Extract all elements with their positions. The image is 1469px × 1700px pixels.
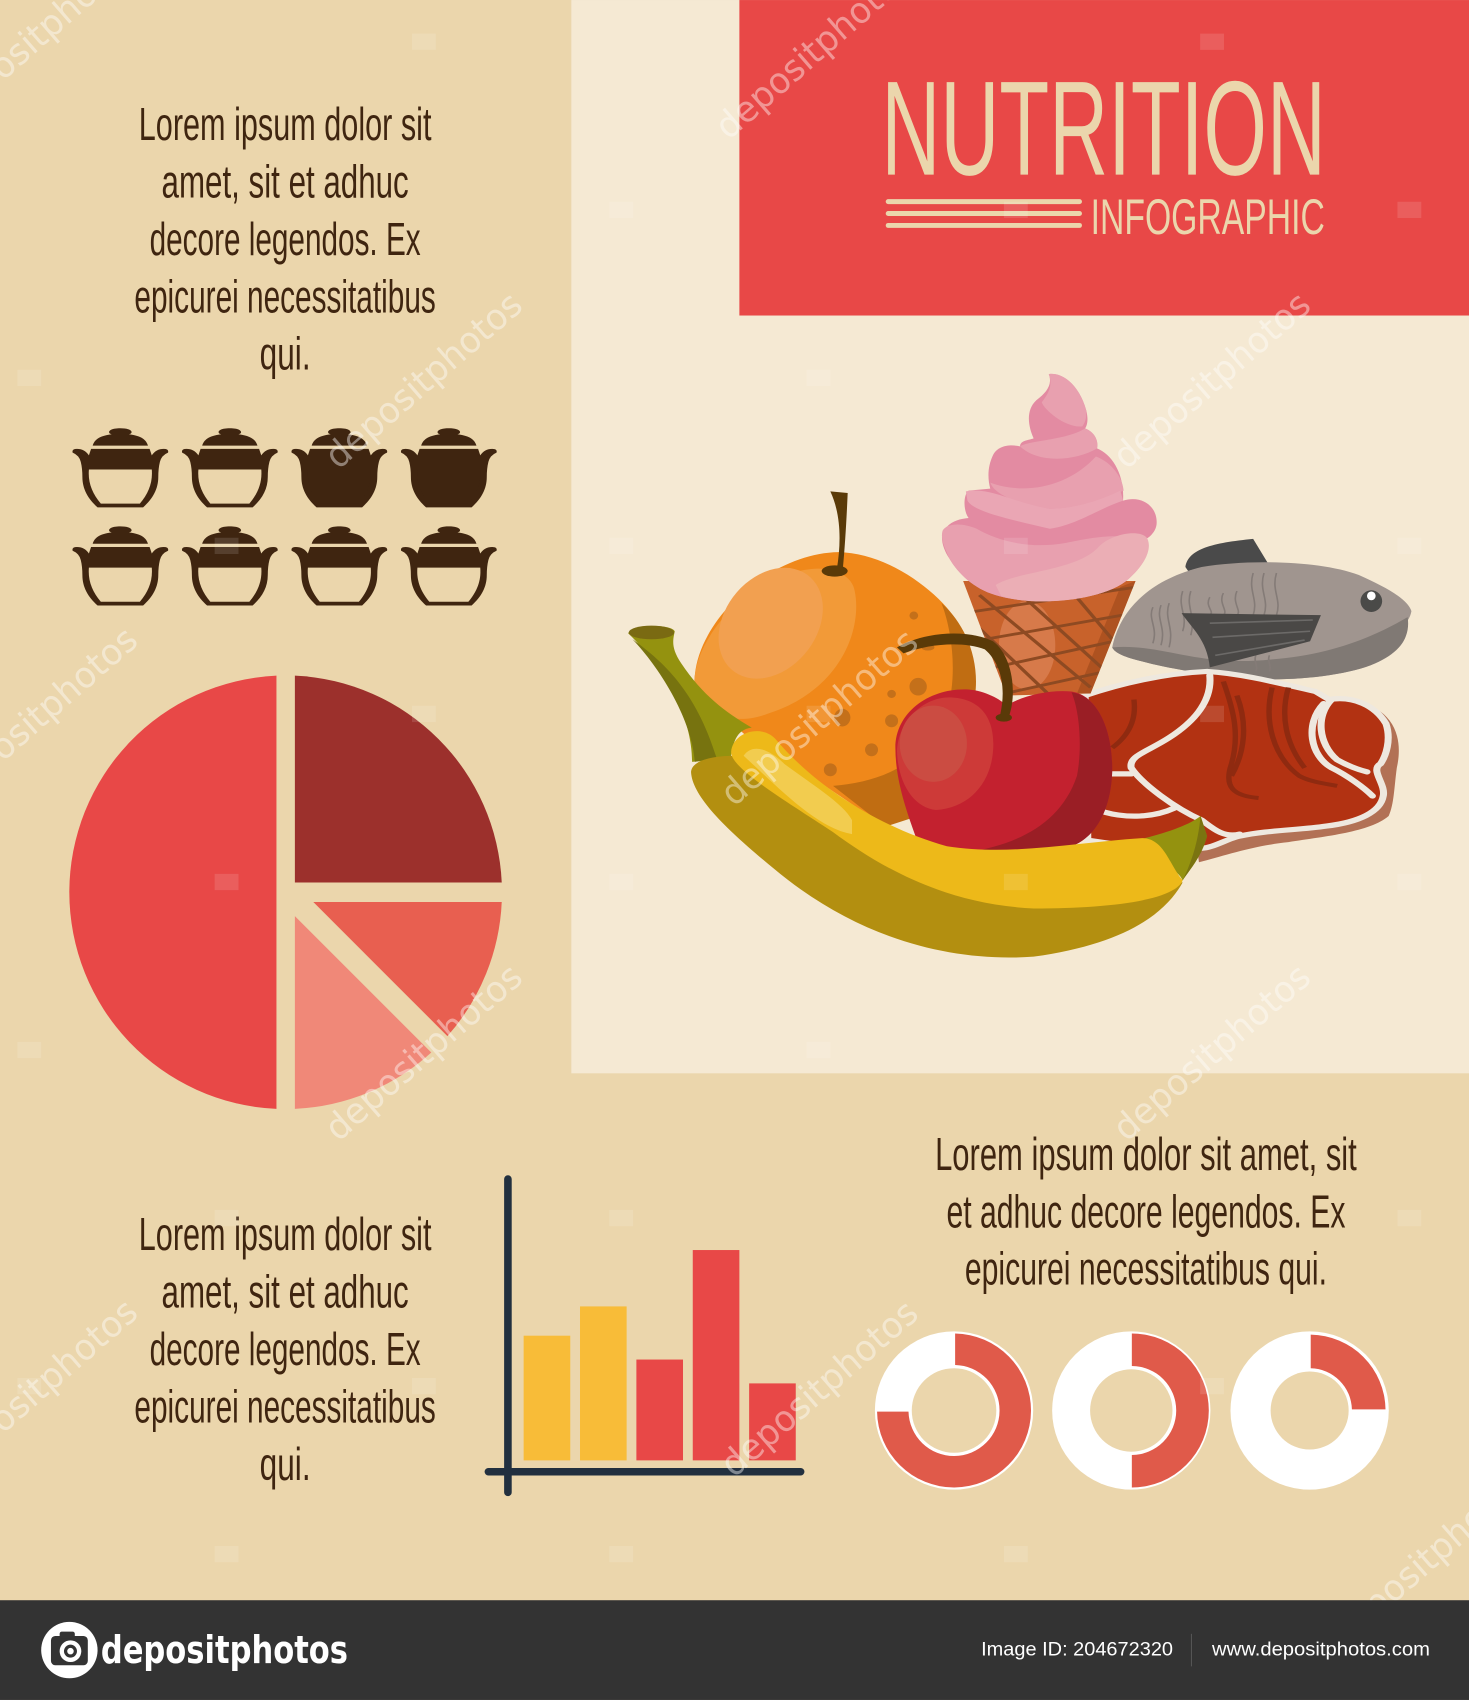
watermark: diagonal wordmarks: depositphotos bbox=[317, 284, 531, 477]
ice cream swirl bbox=[942, 374, 1157, 601]
text block: top left: Lorem ipsum dolor sit bbox=[139, 98, 432, 150]
bar 4 bbox=[693, 1250, 739, 1460]
text block: top left bbox=[134, 98, 436, 380]
panel: red title banner bbox=[739, 0, 1469, 316]
text block: top left: decore legendos. Ex bbox=[150, 213, 421, 265]
icon grid: cooking pots bbox=[72, 428, 497, 606]
pie slice: quarter bbox=[295, 676, 502, 883]
illustration: food group bbox=[628, 374, 1411, 958]
watermark: diagonal wordmarks: depositphotos bbox=[317, 956, 531, 1149]
text block: top left: qui. bbox=[260, 328, 311, 380]
donut chart: 50 percent bbox=[1052, 1331, 1210, 1490]
pie chart bbox=[69, 676, 502, 1109]
footer bar bbox=[0, 1600, 1469, 1700]
bar 1 bbox=[524, 1336, 570, 1460]
fish bbox=[1112, 539, 1411, 679]
text block: bottom right bbox=[935, 1128, 1357, 1295]
icon: camera logo bbox=[41, 1622, 98, 1678]
website url: www.depositphotos.com bbox=[1211, 1639, 1430, 1661]
banana bbox=[628, 626, 1207, 958]
bar chart bbox=[485, 1175, 804, 1496]
text block: top left: epicurei necessitatibus bbox=[134, 270, 436, 322]
watermark: diagonal wordmarks: depositphotos bbox=[713, 621, 926, 814]
bar 2 bbox=[580, 1306, 627, 1460]
orange fruit bbox=[694, 491, 976, 828]
text block: bottom left: Lorem ipsum dolor sit bbox=[139, 1208, 432, 1260]
gap between apple and banana bbox=[887, 818, 925, 842]
pot 2 empty bbox=[182, 428, 278, 507]
bar 5 bbox=[749, 1383, 796, 1460]
brand name: depositphotos bbox=[101, 1628, 348, 1672]
pot 5 empty bbox=[72, 526, 168, 606]
text block: bottom left: amet, sit et adhuc bbox=[162, 1266, 409, 1318]
watermark: diagonal wordmarks: depositphotos bbox=[713, 1292, 926, 1485]
text block: bottom left: decore legendos. Ex bbox=[150, 1323, 421, 1375]
pot 3 full bbox=[291, 428, 387, 507]
bar 3 bbox=[636, 1360, 683, 1460]
pie slice: light bbox=[295, 916, 431, 1109]
pot 6 empty bbox=[182, 526, 278, 606]
pie slice: half bbox=[69, 676, 276, 1109]
pie slice: medium bbox=[313, 902, 502, 1036]
panel: light cream illustration area bbox=[571, 0, 1469, 1073]
watermark: diagonal wordmarks: depositphotos bbox=[1105, 284, 1319, 477]
donut chart: 75 percent bbox=[875, 1331, 1033, 1490]
text block: top left: amet, sit et adhuc bbox=[162, 155, 409, 207]
apple bbox=[895, 634, 1112, 853]
subtitle decoration: three stripes bbox=[886, 199, 1082, 228]
image id: Image ID: 204672320 bbox=[981, 1639, 1173, 1661]
chart axes bbox=[485, 1175, 804, 1496]
text block: bottom left: epicurei necessitatibus bbox=[134, 1380, 436, 1432]
text block: bottom left bbox=[134, 1208, 436, 1490]
meat steak bbox=[1085, 671, 1399, 862]
pot 4 full bbox=[401, 428, 497, 507]
text block: bottom left: qui. bbox=[260, 1438, 311, 1490]
pot 1 empty bbox=[72, 428, 168, 507]
watermark: diagonal wordmarks: depositphotos bbox=[1105, 956, 1319, 1149]
pot 8 empty bbox=[401, 526, 497, 606]
pot 7 empty bbox=[291, 526, 387, 606]
subtitle: infographic: INFOGRAPHIC bbox=[1091, 189, 1325, 245]
donut chart: 25 percent bbox=[1230, 1331, 1389, 1490]
ice cream cone bbox=[942, 374, 1157, 696]
